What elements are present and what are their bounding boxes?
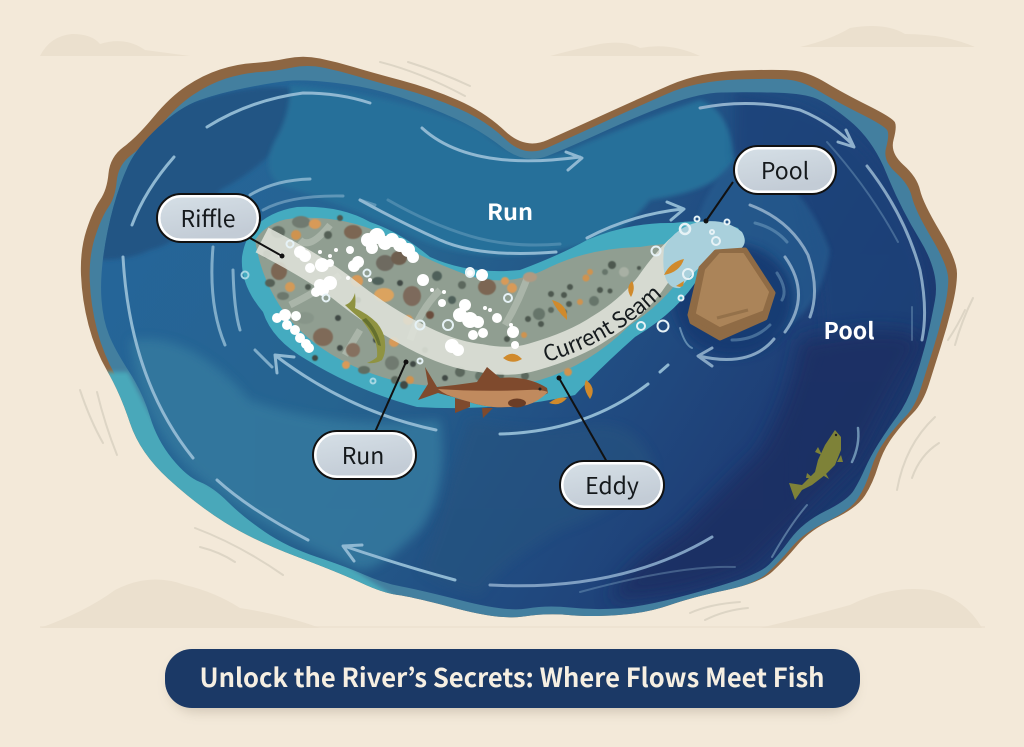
label: Run (callout): Run	[342, 437, 384, 471]
lighter water top centre	[269, 85, 735, 256]
flow arrows	[123, 93, 925, 592]
dark water around boulder	[673, 244, 793, 356]
mid water lower centre	[637, 456, 640, 460]
gravel cross-currents	[290, 225, 530, 355]
fish: small trout, deep pool	[789, 430, 843, 500]
island: turquoise shallows	[242, 207, 743, 408]
decorative clouds and hills	[40, 26, 985, 628]
deep water lower right	[610, 330, 925, 600]
boulder	[690, 250, 773, 338]
label: Riffle	[157, 194, 284, 258]
water label: Run: Run	[487, 195, 533, 227]
seam label: Current Seam	[544, 288, 662, 360]
label: Pool (callout): Pool	[761, 152, 809, 186]
title bar: Unlock the River’s Secrets: Where Flows Meet Fish	[200, 658, 824, 695]
fish: brown trout	[418, 367, 548, 418]
bubbles	[242, 216, 730, 384]
current seam band	[262, 240, 690, 361]
leaves	[503, 259, 684, 404]
stones	[263, 215, 641, 389]
river water body	[101, 80, 936, 610]
white water foam	[272, 228, 519, 356]
label: Eddy	[556, 376, 664, 509]
label: Pool (callout)	[704, 146, 836, 224]
title bar	[165, 649, 860, 712]
island: gravel bed	[255, 218, 700, 388]
water label: Pool: Pool	[824, 312, 874, 346]
bank ripples on sand	[80, 62, 973, 620]
mid water right centre	[700, 168, 830, 326]
turquoise shallows lower left	[104, 372, 395, 597]
seam tip: pale water	[663, 221, 745, 288]
fish: olive trout on gravel	[345, 293, 385, 363]
label: Eddy: Eddy	[585, 467, 639, 501]
label: Riffle: Riffle	[180, 200, 236, 234]
lighter water lower left	[130, 339, 442, 570]
label: Run (callout)	[313, 360, 416, 479]
river edge: steel blue band	[90, 66, 948, 618]
darker water upper left	[100, 87, 300, 260]
dark water upper right	[732, 95, 792, 157]
river bank: brown edge	[81, 57, 957, 617]
